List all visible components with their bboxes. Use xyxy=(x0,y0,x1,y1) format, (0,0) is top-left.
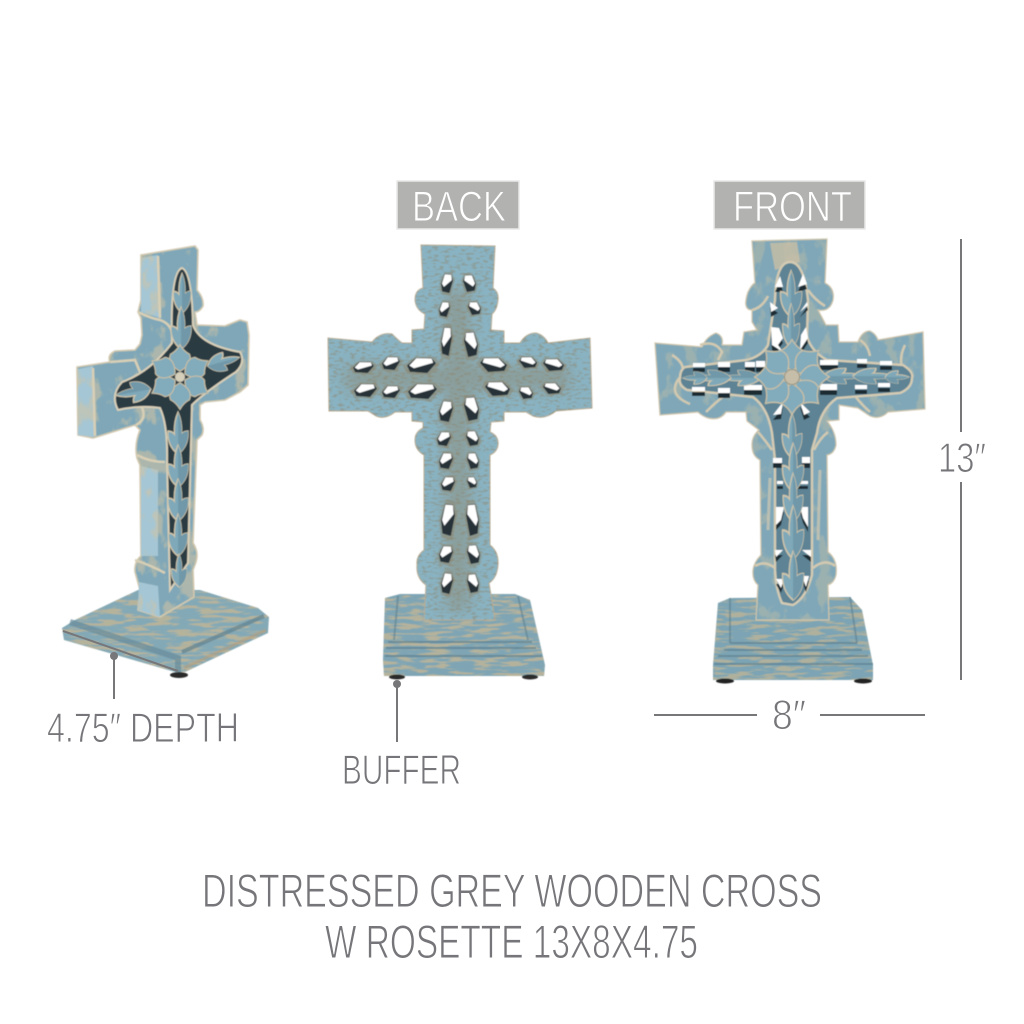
front view cross xyxy=(655,239,925,684)
front view base xyxy=(713,597,873,684)
callout: buffer: BUFFER xyxy=(342,746,461,793)
callout: depth: 4.75″ DEPTH xyxy=(47,704,239,751)
title xyxy=(202,864,822,968)
label: front: FRONT xyxy=(733,183,852,231)
back holes xyxy=(350,272,567,597)
front tracery xyxy=(680,262,912,605)
side leaves xyxy=(114,273,242,587)
dimension: height 13 inches: 13″ xyxy=(938,434,986,481)
dimension: width 8 inches: 8″ xyxy=(772,691,806,738)
side faces xyxy=(78,255,160,617)
side tracery xyxy=(115,268,242,590)
side scroll and collar edges xyxy=(93,256,172,573)
back view cross xyxy=(328,245,592,680)
label: back: BACK xyxy=(412,183,506,231)
callout: depth xyxy=(47,631,239,751)
front distress patches and scroll edges xyxy=(672,242,910,568)
front shadows under openings xyxy=(692,279,892,593)
callout: buffer xyxy=(342,680,461,793)
back view base xyxy=(383,594,545,680)
front leaves and rosette xyxy=(683,271,909,600)
side view base xyxy=(62,590,269,678)
front openings xyxy=(692,274,892,588)
title: W ROSETTE 13X8X4.75 xyxy=(325,915,698,968)
side view cross xyxy=(62,246,269,678)
